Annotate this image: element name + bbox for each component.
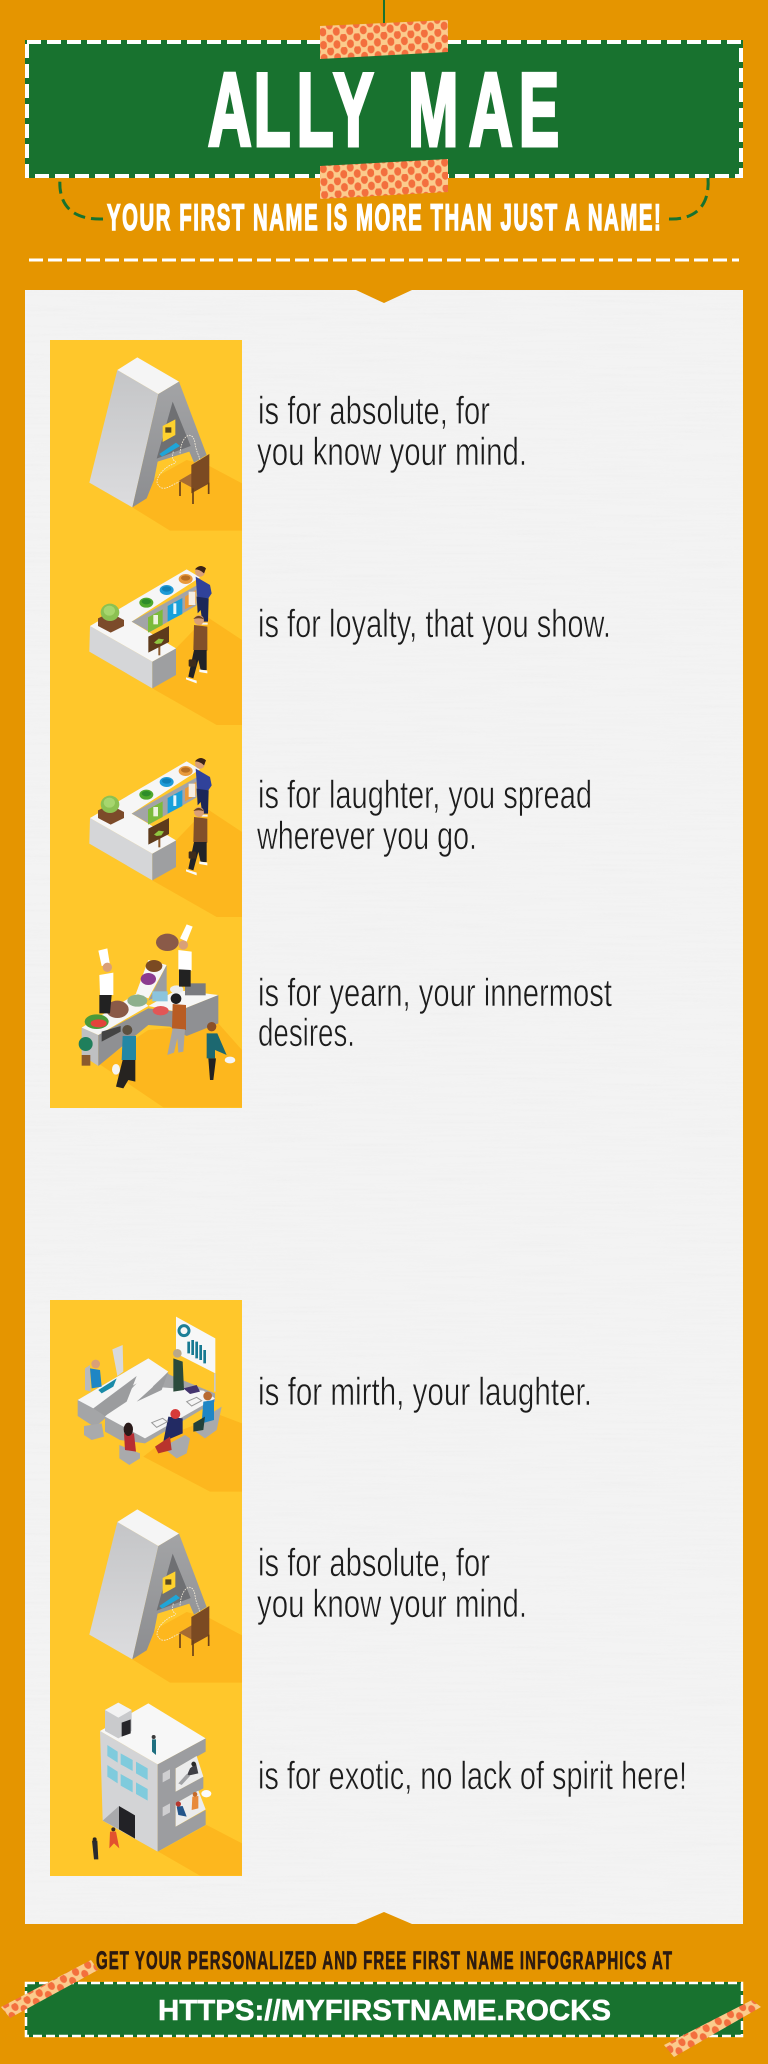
- illustration column: M A E: [50, 1300, 242, 1876]
- left footer tape: [1, 1960, 98, 2018]
- illustration column: A L L Y: [50, 340, 242, 1108]
- subtitle: YOUR FIRST NAME IS MORE THAN JUST A NAME!: [107, 198, 661, 239]
- right dashed curl: [669, 178, 708, 219]
- text: Y line: is for yearn, your innermost: [258, 972, 612, 1015]
- footer url: HTTPS://MYFIRSTNAME.ROCKS: [158, 1995, 611, 2027]
- text: A line repeat: [257, 1542, 527, 1626]
- hanging string: [383, 0, 385, 24]
- text: M line: is for mirth, your laughter.: [258, 1371, 592, 1414]
- text: L line 2: is for laughter, you spread: [258, 774, 592, 817]
- icon: letter Y buffet: [79, 924, 242, 1107]
- right footer tape: [664, 2000, 761, 2057]
- left dashed curl: [60, 178, 103, 219]
- text: A line: you know your mind.: [257, 431, 527, 474]
- text: A line: is for absolute, for: [258, 390, 490, 433]
- icon: letter M meeting table: [78, 1317, 242, 1492]
- icon: letter A desk: [89, 357, 242, 531]
- top tape: [320, 20, 448, 59]
- text: A line: [257, 390, 527, 474]
- dashed divider: [29, 258, 739, 262]
- text: Y line: desires.: [258, 1012, 355, 1055]
- title: ALLY MAE: [208, 53, 559, 169]
- icon: letter L recycling counter: [89, 566, 242, 725]
- text: A line repeat: is for absolute, for: [258, 1542, 490, 1585]
- text: L line: is for loyalty, that you show.: [258, 603, 611, 646]
- text: Y line: [258, 972, 612, 1055]
- text: A line repeat: you know your mind.: [257, 1583, 527, 1626]
- bottom tape: [320, 159, 448, 199]
- icon: letter A desk: [89, 1509, 242, 1683]
- icon: letter L recycling counter repeat: [89, 758, 242, 917]
- footer call to action: GET YOUR PERSONALIZED AND FREE FIRST NAME INFOGRAPHICS AT: [96, 1947, 672, 1975]
- footer banner: [25, 1982, 743, 2037]
- text: L line 2: [256, 774, 592, 858]
- icon: letter E building: [92, 1703, 242, 1876]
- main panel: [25, 290, 743, 1924]
- header banner: [25, 40, 743, 178]
- text: L line 2: wherever you go.: [256, 815, 477, 858]
